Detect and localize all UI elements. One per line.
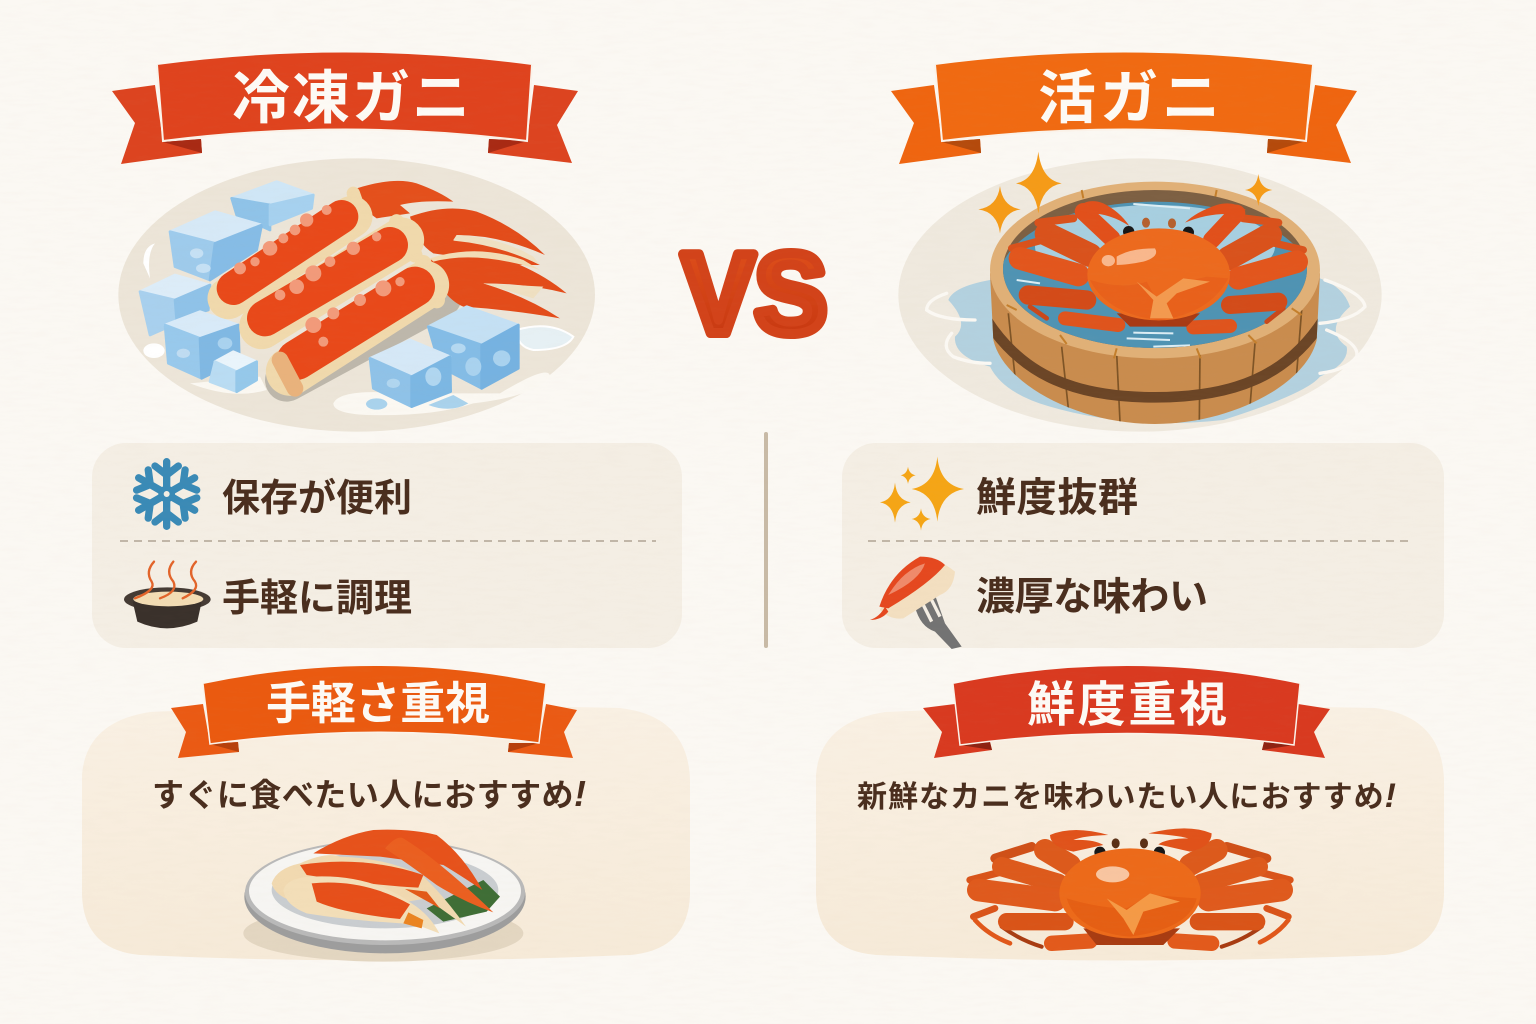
- divider: [764, 432, 768, 648]
- illustration: crab claws on plate: [243, 830, 526, 962]
- ice cubes back: [140, 182, 313, 392]
- text: 鮮度抜群: 鮮度抜群: [976, 476, 1138, 520]
- icon: snowflake: [133, 462, 201, 526]
- banner: 鮮度重視: [923, 666, 1330, 758]
- illustration: live crab in wooden tub: [898, 152, 1382, 432]
- heading: 手軽さ重視: 手軽さ重視: [266, 678, 490, 729]
- sparkles: [978, 152, 1272, 233]
- panel: 鮮度重視: [816, 666, 1444, 960]
- claw 1: [357, 181, 453, 218]
- leg 1: [228, 193, 363, 298]
- heading: 鮮度重視: 鮮度重視: [1027, 679, 1227, 732]
- leg 3: [280, 263, 437, 388]
- heading: 活ガニ: 活ガニ: [1038, 66, 1220, 131]
- text: すぐに食べたい人におすすめ!: すぐに食べたい人におすすめ!: [152, 773, 586, 814]
- ice cubes front: [370, 307, 518, 407]
- panel: 冷凍ガニ features: [92, 443, 682, 648]
- text: 濃厚な味わい: 濃厚な味わい: [976, 576, 1208, 619]
- illustration: whole crab: [970, 828, 1290, 947]
- panel: 手軽さ重視: [82, 666, 690, 962]
- crab in tub: [1012, 201, 1303, 327]
- water puddle: [927, 278, 1365, 423]
- VS mark: VS: [682, 231, 827, 358]
- claw 2: [410, 208, 545, 265]
- banner: 手軽さ重視: [171, 666, 577, 758]
- text: 新鮮なカニを味わいたい人におすすめ!: 新鮮なカニを味わいたい人におすすめ!: [857, 777, 1396, 815]
- panel: 活ガニ features: [842, 443, 1444, 649]
- illustration: frozen crab legs on ice: [118, 158, 595, 432]
- tub: [987, 182, 1323, 424]
- leg 2: [262, 222, 415, 327]
- icon: sparkles: [880, 457, 964, 531]
- banner: 活ガニ: [891, 52, 1357, 164]
- heading: 冷凍ガニ: 冷凍ガニ: [232, 66, 470, 131]
- text: 手軽に調理: 手軽に調理: [222, 578, 412, 620]
- icon: steaming pot: [124, 562, 211, 628]
- text: 保存が便利: 保存が便利: [222, 478, 412, 520]
- claw 3: [430, 254, 567, 318]
- banner: 冷凍ガニ: [112, 52, 578, 164]
- icon: crab meat on fork: [870, 557, 962, 649]
